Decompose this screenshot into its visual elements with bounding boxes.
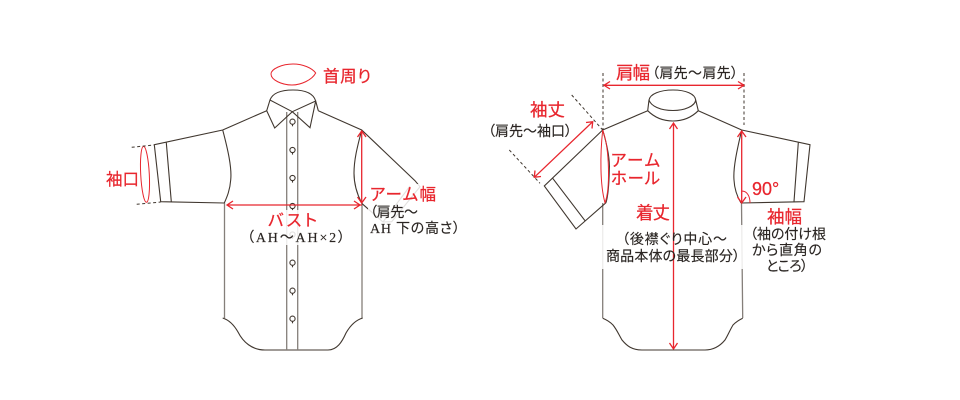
cuff dashed guides <box>132 145 161 204</box>
shoulder dashed guides <box>603 73 744 130</box>
sleeve length arrow <box>534 122 593 177</box>
cuff measure ellipse <box>139 146 151 202</box>
right shirt right sleeve <box>734 130 810 203</box>
length arrow <box>670 123 678 349</box>
label: sleeve width: 袖幅 <box>767 207 802 227</box>
label: shoulder: 肩幅 <box>616 63 650 83</box>
white panels behind labels <box>246 184 748 269</box>
sleeve length dashed guides <box>509 95 603 183</box>
bust arrow <box>227 201 362 209</box>
sleeve width note line 1: （袖の付け根 <box>750 227 826 243</box>
right shirt left sleeve <box>544 130 609 229</box>
neck measure loop <box>271 64 316 85</box>
label: armhole line 1: アーム <box>611 152 660 170</box>
label: bust: バスト <box>268 212 317 230</box>
arm width note line 1: （肩先〜 <box>370 205 418 221</box>
left shirt right sleeve <box>318 111 420 222</box>
label: armhole line 2: ホール <box>611 170 660 188</box>
label: neck: 首周り <box>323 67 371 86</box>
sleeve length note: （肩先〜袖口） <box>488 124 572 140</box>
bust note: （AH〜AH×2） <box>247 230 345 246</box>
sleeve width arrow <box>738 131 746 203</box>
right shirt collar <box>648 90 698 121</box>
sleeve width note line 2: から直角の <box>752 243 822 259</box>
left shirt collar <box>267 90 318 128</box>
left shirt buttons <box>290 119 295 323</box>
arm width note line 2: AH 下の高さ） <box>370 220 460 237</box>
sleeve width note line 3: ところ） <box>766 259 808 275</box>
left shirt left sleeve <box>154 111 267 203</box>
right shirt body <box>603 203 743 318</box>
right shirt: back view <box>544 90 810 350</box>
label: cuff: 袖口 <box>106 170 139 189</box>
shoulder arrow <box>604 82 744 89</box>
label: 90 degrees: 90° <box>752 179 779 199</box>
arm width arrow <box>358 131 366 203</box>
length note line 1: （後襟ぐり中心〜 <box>622 232 727 248</box>
left shirt placket <box>287 112 298 350</box>
right angle arc <box>742 191 750 203</box>
left shirt: front view <box>154 90 420 350</box>
label: length: 着丈 <box>636 203 670 223</box>
length note line 2: 商品本体の最長部分） <box>606 249 740 265</box>
label: sleeve length: 袖丈 <box>530 100 565 120</box>
shoulder note: （肩先〜肩先） <box>652 66 738 82</box>
left shirt body <box>224 203 362 318</box>
label: arm width: アーム幅 <box>370 185 436 204</box>
right shirt shoulders <box>603 111 742 130</box>
right shirt hem <box>603 318 743 350</box>
armhole measure <box>601 130 609 203</box>
left shirt hem <box>223 318 363 350</box>
